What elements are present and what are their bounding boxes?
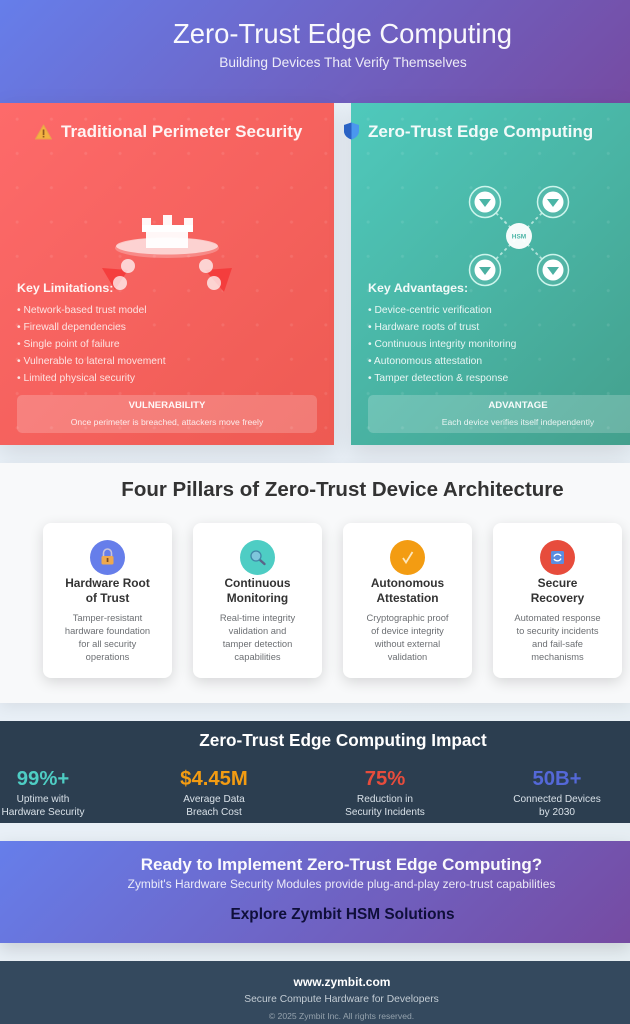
pillar title [371, 576, 444, 605]
stat: reduction: Reduction in [357, 794, 413, 804]
pillar title [531, 576, 584, 605]
pillar description: Tamper-resistant [73, 613, 142, 623]
pillar title: Secure [538, 576, 577, 590]
call to action banner [0, 841, 630, 943]
heading: impact: Zero-Trust Edge Computing Impact [199, 730, 487, 750]
stat: uptime: Hardware Security [1, 807, 85, 818]
heading: traditional perimeter security: Traditional Perimeter Security [61, 122, 302, 141]
HSM hub: HSM [512, 234, 526, 240]
pillar title: Continuous [224, 576, 291, 590]
pillar title: Recovery [531, 591, 584, 605]
vulnerability callout: VULNERABILITY [129, 400, 205, 411]
advantages list [368, 305, 516, 384]
pillar title [224, 576, 291, 605]
card: autonomous attestation [343, 523, 472, 678]
pillar description: Real-time integrity [220, 613, 295, 623]
copyright: © 2025 Zymbit Inc. All rights reserved. [269, 1011, 414, 1021]
connection lines [496, 213, 542, 259]
pillar description [65, 613, 150, 662]
footer tagline: Secure Compute Hardware for Developers [244, 994, 439, 1005]
stat: uptime: Uptime with [17, 794, 69, 804]
heading: four pillars: Four Pillars of Zero-Trust Device Architecture [121, 478, 564, 501]
pillar description: to security incidents [516, 626, 599, 636]
pillar title: Hardware Root [65, 576, 150, 590]
pillar title: Attestation [376, 591, 439, 605]
illustration: device network around HSM [468, 186, 570, 286]
pillar description: Automated response [514, 613, 601, 623]
limitations list: • Single point of failure [17, 339, 120, 350]
icon: shield [344, 122, 359, 140]
devices [470, 186, 568, 286]
subtitle: Building Devices That Verify Themselves [219, 55, 467, 70]
stat: breach cost: Breach Cost [186, 807, 242, 818]
footer url: www.zymbit.com [294, 975, 390, 989]
pillar description: and fail-safe [532, 639, 583, 649]
cta text: Zymbit's Hardware Security Modules provide plug-and-play zero-trust capabilities [128, 877, 555, 891]
card: secure recovery [493, 523, 622, 678]
stat: reduction [345, 768, 425, 818]
stat: uptime [1, 768, 85, 818]
pillar description: mechanisms [531, 652, 584, 662]
advantages list: • Device-centric verification [368, 305, 492, 316]
advantage callout: Each device verifies itself independently [442, 417, 594, 427]
limitations list [17, 305, 166, 384]
pillar description: without external [375, 639, 440, 649]
pillar description: validation [388, 652, 427, 662]
advantages list: • Hardware roots of trust [368, 322, 479, 333]
stat: breach cost [180, 768, 248, 818]
panel: traditional perimeter security [0, 103, 334, 445]
stat: reduction: 75% [365, 768, 405, 790]
moat ellipse [115, 238, 219, 258]
limitations list: • Network-based trust model [17, 305, 147, 316]
pillar title: of Trust [86, 591, 129, 605]
pillar description: of device integrity [371, 626, 444, 636]
heading: zero-trust edge computing: Zero-Trust Edge Computing [368, 122, 593, 141]
vulnerability callout: Once perimeter is breached, attackers move freely [71, 417, 263, 427]
limitations list: • Firewall dependencies [17, 322, 126, 333]
footer [0, 961, 630, 1024]
breach points [113, 259, 221, 290]
pillar description: operations [86, 652, 129, 662]
stat: connected devices [513, 768, 601, 818]
title: Zero-Trust Edge Computing [173, 18, 512, 49]
stat: connected devices: 50B+ [532, 768, 582, 790]
icon: lock [90, 540, 125, 575]
pillar description: hardware foundation [65, 626, 150, 636]
limitations list: • Vulnerable to lateral movement [17, 356, 166, 367]
stat: uptime: 99%+ [17, 768, 69, 790]
advantages list: • Continuous integrity monitoring [368, 339, 516, 350]
attack arrows [102, 268, 232, 292]
icon: magnifier [240, 540, 275, 575]
pillar description: for all security [79, 639, 136, 649]
advantages list: • Tamper detection & response [368, 373, 508, 384]
icon: refresh [540, 540, 575, 575]
stat: breach cost: $4.45M [180, 768, 248, 790]
vulnerability callout [17, 395, 317, 433]
pillar description: tamper detection [223, 639, 292, 649]
stat: connected devices: by 2030 [539, 807, 575, 818]
cta heading: Ready to Implement Zero-Trust Edge Computing? [141, 855, 542, 874]
pillar title: Monitoring [227, 591, 288, 605]
card: continuous monitoring [193, 523, 322, 678]
header banner [0, 0, 630, 103]
pillar description [514, 613, 601, 662]
advantage callout: ADVANTAGE [488, 400, 548, 411]
castle [142, 215, 193, 248]
pillar description: Cryptographic proof [366, 613, 449, 623]
pillar description: capabilities [234, 652, 281, 662]
cta button label: Explore Zymbit HSM Solutions [230, 906, 455, 923]
pillar description [366, 613, 449, 662]
limitations list: • Limited physical security [17, 373, 135, 384]
stat: connected devices: Connected Devices [513, 794, 601, 804]
pillar description [220, 613, 296, 662]
panel: four pillars [0, 463, 630, 703]
pillar description: validation and [229, 626, 286, 636]
panel: impact statistics [0, 721, 630, 823]
advantages list: • Autonomous attestation [368, 356, 482, 367]
key limitations heading: Key Limitations: [17, 281, 113, 295]
card: hardware root of trust [43, 523, 172, 678]
panel: zero-trust edge computing [351, 103, 630, 445]
advantage callout [368, 395, 630, 433]
icon: check mark [390, 540, 425, 575]
pillar title: Autonomous [371, 576, 444, 590]
pillar title [65, 576, 150, 605]
illustration: castle and attack arrows [102, 215, 232, 292]
stat: breach cost: Average Data [183, 794, 245, 804]
stat: reduction: Security Incidents [345, 807, 425, 818]
key advantages heading: Key Advantages: [368, 281, 468, 295]
